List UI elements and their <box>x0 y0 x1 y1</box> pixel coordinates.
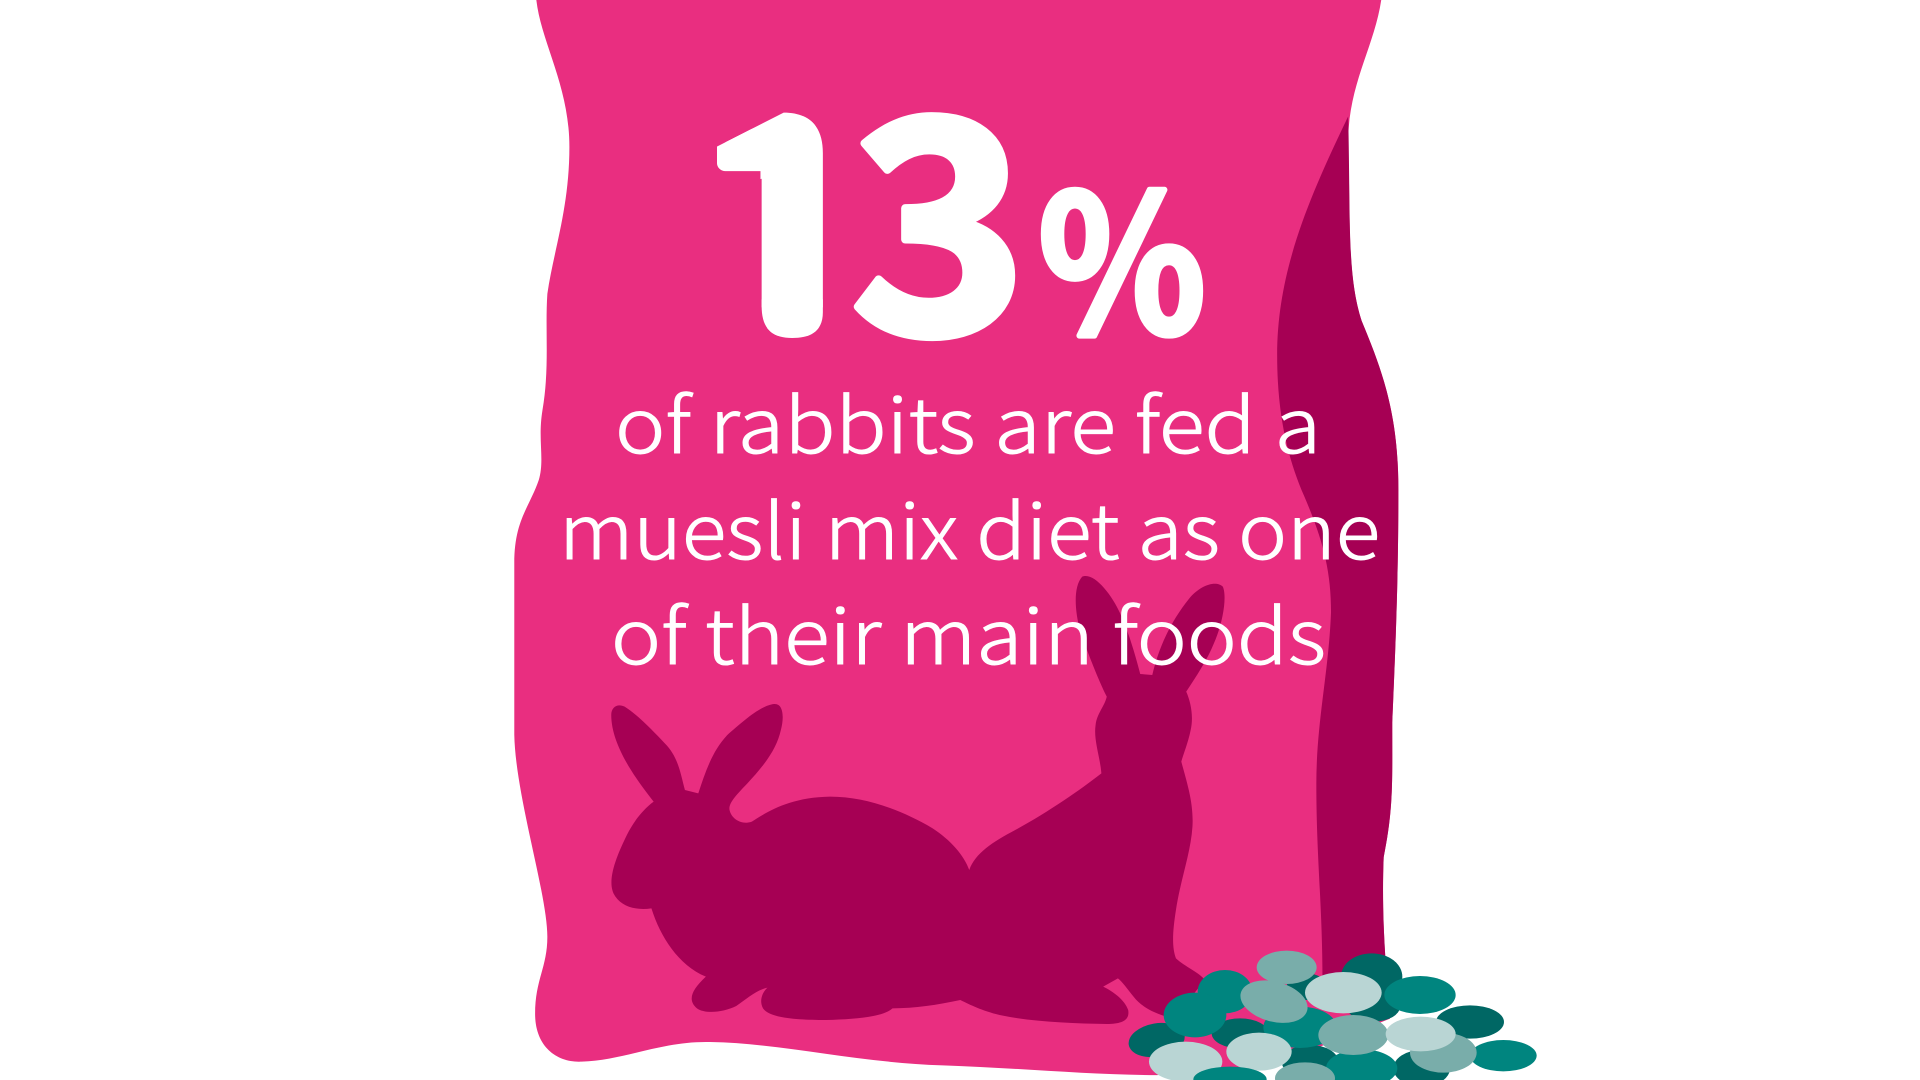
description text: of rabbits are fed a <box>615 365 1321 475</box>
bag side shadow <box>1277 116 1398 1019</box>
description text: of their main foods <box>611 576 1326 686</box>
pile of muesli pellets <box>1126 951 1537 1080</box>
statistic: 13%: 3 <box>850 0 1028 418</box>
description text <box>559 365 1380 686</box>
rabbits silhouette <box>611 576 1225 1024</box>
description text: muesli mix diet as one <box>559 471 1380 581</box>
statistic: 13% <box>717 112 1204 342</box>
statistic: 13%: % <box>1038 113 1206 388</box>
panel: feed bag <box>514 0 1398 1075</box>
